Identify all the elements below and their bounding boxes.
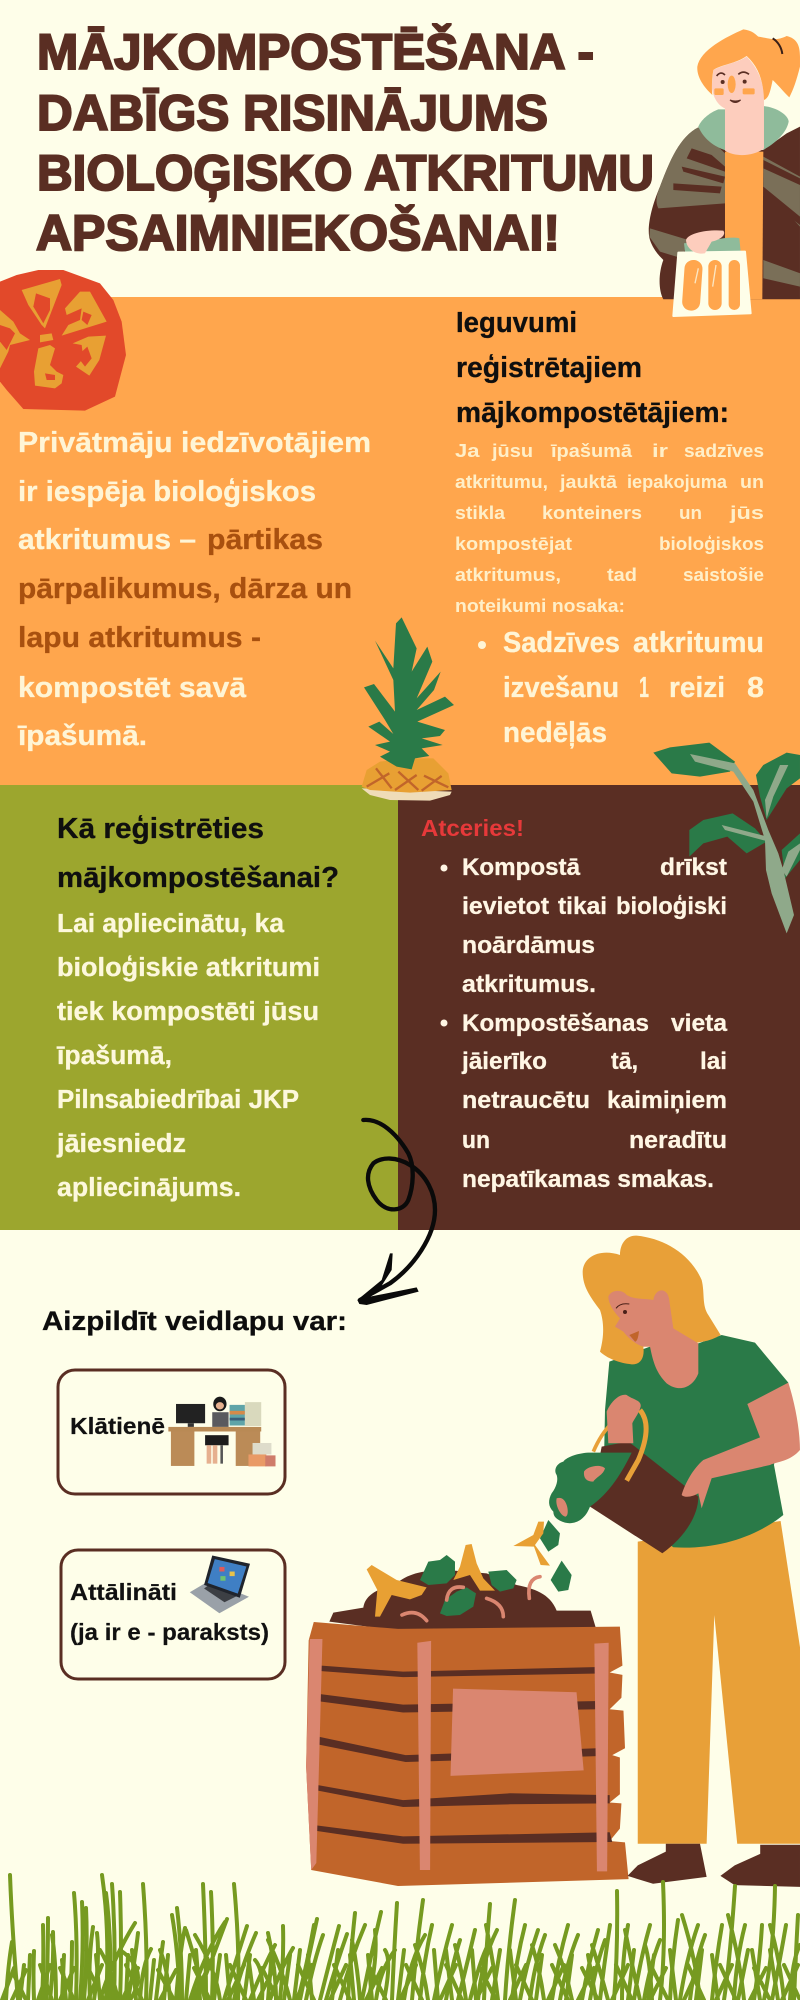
text block: remember list: netraucētu bbox=[462, 1087, 590, 1114]
text block: benefits paragraph: noteikumi nosaka: bbox=[455, 595, 625, 616]
text block: intro paragraph: ir iespēja bioloģiskos bbox=[18, 476, 316, 508]
text block: intro paragraph: pārpalikumus, dārza un bbox=[18, 573, 352, 605]
text block: remember list: ievietot bbox=[462, 893, 549, 920]
text block: benefits paragraph: un bbox=[679, 502, 702, 523]
text block: benefits heading bbox=[456, 307, 729, 429]
text block: remember list: Atceries! bbox=[421, 815, 524, 841]
text block: benefits paragraph: saistošie bbox=[683, 564, 764, 585]
text block: benefits paragraph bbox=[455, 440, 764, 616]
text block: how to register: īpašumā, bbox=[56, 1042, 172, 1070]
text block: benefits paragraph: jauktā bbox=[559, 471, 618, 492]
text block: intro paragraph bbox=[17, 427, 371, 752]
text block: remember list: bioloģiski bbox=[616, 893, 727, 920]
text block: intro paragraph: Privātmāju iedzīvotājiem bbox=[18, 427, 371, 459]
illustration: plant leaves bbox=[653, 743, 800, 933]
text block: benefits paragraph: ir bbox=[652, 440, 668, 461]
text block: remember list: Kompostā bbox=[462, 854, 580, 881]
text block: intro paragraph: īpašumā. bbox=[17, 720, 147, 752]
text block: benefits paragraph: kompostējat bbox=[455, 533, 572, 554]
text block: remember list: drīkst bbox=[660, 854, 727, 881]
text block: remember list: nepatīkamas smakas. bbox=[462, 1166, 714, 1193]
text block: how to register: tiek kompostēti jūsu bbox=[57, 998, 319, 1026]
text block: remember list: vieta bbox=[671, 1010, 727, 1037]
text block: how to register: Pilnsabiedrībai JKP bbox=[57, 1086, 299, 1114]
text block: benefits paragraph: jūsu bbox=[491, 440, 533, 461]
text block: how to register: jāiesniedz bbox=[56, 1130, 186, 1158]
text block: benefits paragraph: sadzīves bbox=[684, 440, 764, 461]
text block: benefits heading: mājkompostētājiem: bbox=[456, 397, 729, 429]
text block: remember list: lai bbox=[700, 1048, 727, 1075]
text block: collection frequency bullet: atkritumu bbox=[633, 627, 764, 659]
title: BIOLOĢISKO ATKRITUMU bbox=[37, 145, 654, 201]
text block: benefits paragraph: bioloģiskos bbox=[659, 533, 764, 554]
text block: benefits paragraph: īpašumā bbox=[550, 440, 633, 461]
text block: intro paragraph: lapu atkritumus - bbox=[18, 622, 261, 654]
text block: how to register bbox=[56, 813, 339, 1202]
title: DABĪGS RISINĀJUMS bbox=[37, 85, 548, 141]
panel: orange band bbox=[0, 297, 800, 785]
illustration: woman with bread bag bbox=[649, 29, 800, 316]
heading: fill the form: Aizpildīt veidlapu var: bbox=[42, 1306, 347, 1336]
text block: how to register: apliecinājums. bbox=[57, 1174, 241, 1202]
text block: benefits paragraph: stikla bbox=[455, 502, 506, 523]
text block: how to register: Lai apliecinātu, ka bbox=[57, 910, 285, 938]
text block: remember list: noārdāmus bbox=[462, 932, 595, 959]
text block: remember list: tā, bbox=[611, 1048, 638, 1075]
panel: green registration background bbox=[0, 785, 398, 1230]
illustration: trousers and boots bbox=[628, 1521, 800, 1887]
icon: laptop bbox=[190, 1555, 250, 1613]
text block: remember list: tikai bbox=[558, 893, 607, 920]
text block: collection frequency bullet: 1 bbox=[639, 672, 649, 704]
text block: benefits heading: reģistrētajiem bbox=[456, 352, 642, 384]
icon: tomato slice bbox=[0, 270, 126, 411]
text block: intro paragraph: atkritumus – bbox=[18, 524, 196, 556]
text block: benefits heading: Ieguvumi bbox=[456, 307, 577, 339]
title: MĀJKOMPOSTĒŠANA - bbox=[37, 23, 594, 80]
illustration: compost bin bbox=[306, 1622, 629, 1886]
text block: benefits paragraph: atkritumu, bbox=[455, 471, 548, 492]
text block: remember list: Kompostēšanas bbox=[462, 1010, 649, 1037]
text block: benefits paragraph: iepakojuma bbox=[627, 471, 728, 492]
card: remote: (ja ir e - paraksts) bbox=[70, 1619, 269, 1645]
text block: remember list: jāierīko bbox=[461, 1048, 547, 1075]
card: remote: Attālināti bbox=[70, 1579, 177, 1605]
illustration: compost pile bbox=[329, 1520, 596, 1630]
card: in person: Klātienē bbox=[70, 1413, 165, 1439]
text block: collection frequency bullet: izvešanu bbox=[503, 672, 619, 704]
icon: office desk bbox=[168, 1397, 276, 1466]
text block: how to register: mājkompostēšanai? bbox=[57, 862, 339, 894]
text block: intro paragraph: pārtikas bbox=[207, 524, 323, 556]
text block: benefits paragraph: jūs bbox=[729, 502, 764, 523]
text block: benefits paragraph: tad bbox=[607, 564, 637, 585]
text block: benefits paragraph: un bbox=[740, 471, 764, 492]
text block: remember list: un bbox=[462, 1127, 490, 1154]
title bbox=[36, 23, 654, 261]
text block: intro paragraph: kompostēt savā bbox=[18, 672, 247, 704]
arrow: curly hand-drawn bbox=[357, 1120, 435, 1305]
card: in person bbox=[58, 1370, 285, 1494]
text block: benefits paragraph: Ja bbox=[455, 440, 480, 461]
text block: collection frequency bullet: 8 bbox=[747, 672, 764, 704]
text block: how to register: Kā reģistrēties bbox=[57, 813, 264, 845]
text block: benefits paragraph: konteiners bbox=[542, 502, 642, 523]
title: APSAIMNIEKOŠANAI! bbox=[36, 204, 560, 261]
text block: remember list: neradītu bbox=[629, 1127, 727, 1154]
text block: remember list bbox=[421, 815, 727, 1193]
text block: remember list: atkritumus. bbox=[462, 971, 596, 998]
card: remote bbox=[61, 1550, 285, 1679]
text block: how to register: bioloģiskie atkritumi bbox=[57, 954, 320, 982]
text block: remember list: kaimiņiem bbox=[607, 1087, 727, 1114]
panel: brown reminder background bbox=[398, 785, 800, 1230]
text block: collection frequency bullet: nedēļās bbox=[503, 717, 607, 749]
text block: benefits paragraph: atkritumus, bbox=[455, 564, 561, 585]
text block: collection frequency bullet: Sadzīves bbox=[503, 627, 620, 659]
text block: collection frequency bullet bbox=[478, 627, 764, 749]
text block: collection frequency bullet: reizi bbox=[669, 672, 725, 704]
illustration: woman pouring waste bbox=[549, 1236, 800, 1553]
illustration: grass bbox=[2, 1875, 800, 2000]
illustration: pineapple bbox=[362, 617, 454, 801]
